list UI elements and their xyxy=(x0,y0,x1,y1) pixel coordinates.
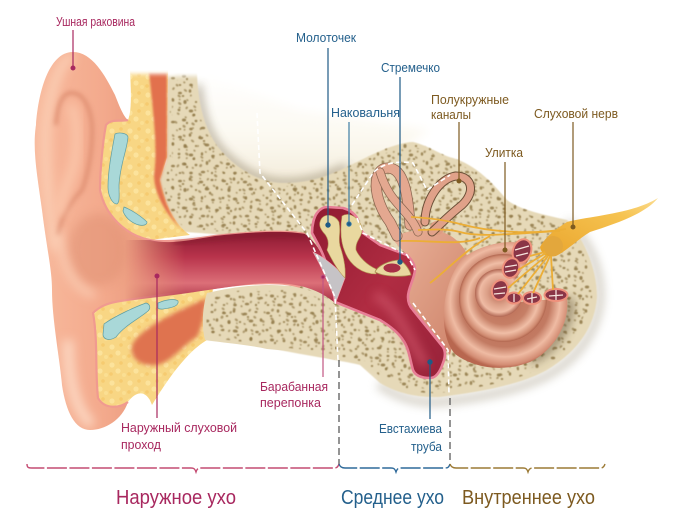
eardrum xyxy=(313,252,345,302)
grey section dividers xyxy=(339,360,450,465)
label: Наружный слуховой проход: Наружный слуховой xyxy=(121,421,237,435)
label: Наружный слуховой проход: проход xyxy=(121,438,162,452)
upper tissue xyxy=(100,60,305,241)
label: Барабанная перепонка xyxy=(260,380,328,410)
label: Молоточек: Молоточек xyxy=(296,31,356,45)
incus xyxy=(341,214,376,274)
brace: middle ear xyxy=(339,464,450,472)
label: Полукружные каналы: Полукружные xyxy=(431,93,509,107)
leader line: Евстахиева труба xyxy=(428,360,432,419)
middle ear cavity xyxy=(312,207,445,378)
upper cartilage xyxy=(108,133,147,225)
heading: Наружное ухо: Наружное ухо xyxy=(116,487,236,509)
leader line: Слуховой нерв xyxy=(571,122,575,229)
outer bone shadow xyxy=(378,222,600,402)
lower tissue xyxy=(93,283,335,407)
label: Барабанная перепонка: перепонка xyxy=(260,396,321,410)
label: Барабанная перепонка: Барабанная xyxy=(260,380,328,394)
leader line: Наружный слуховой проход xyxy=(155,274,159,418)
label: Улитка: Улитка xyxy=(485,146,523,160)
pale lower bone fade xyxy=(320,368,376,398)
cavity highlight xyxy=(375,295,425,365)
label: Наковальня: Наковальня xyxy=(331,106,400,120)
leader line: Улитка xyxy=(503,162,507,252)
label: Полукружные каналы xyxy=(431,93,509,122)
temporal bone xyxy=(160,62,597,397)
stapes xyxy=(375,260,411,276)
label: Наружный слуховой проход xyxy=(121,421,237,452)
heading: Среднее ухо: Среднее ухо xyxy=(341,487,444,509)
vestibule and cochlear base xyxy=(393,220,470,355)
leader line: Молоточек xyxy=(326,48,330,227)
label: Стремечко: Стремечко xyxy=(381,61,440,75)
leader line: Полукружные каналы xyxy=(457,122,461,183)
leader line: Барабанная перепонка xyxy=(321,275,325,377)
canal upper edge shade xyxy=(175,235,305,243)
label: Евстахиева труба: Евстахиева xyxy=(379,422,442,436)
label: Евстахиева труба xyxy=(379,422,442,454)
cochlea drop shadow xyxy=(530,298,569,360)
leader line: Ушная раковина xyxy=(71,30,75,70)
leader line: Наковальня xyxy=(347,122,351,226)
white dashed boundaries xyxy=(257,113,450,395)
cochlea xyxy=(444,242,568,368)
heading: Внутреннее ухо: Внутреннее ухо xyxy=(462,487,595,509)
label: Евстахиева труба: труба xyxy=(411,440,442,454)
ear canal xyxy=(113,232,335,303)
label: Полукружные каналы: каналы xyxy=(431,108,471,122)
skull cavity shading xyxy=(190,70,430,190)
auditory nerve xyxy=(400,198,658,294)
brace: inner ear xyxy=(450,464,605,472)
leader line: Стремечко xyxy=(398,77,402,264)
malleus xyxy=(320,215,345,278)
cochlea sections xyxy=(490,237,568,304)
label: Слуховой нерв: Слуховой нерв xyxy=(534,107,618,121)
auricle (outer ear) xyxy=(35,52,190,430)
label: Ушная раковина: Ушная раковина xyxy=(56,15,135,29)
brace: outer ear xyxy=(27,464,339,472)
lower cartilage xyxy=(103,300,178,339)
semicircular canals xyxy=(376,168,471,236)
